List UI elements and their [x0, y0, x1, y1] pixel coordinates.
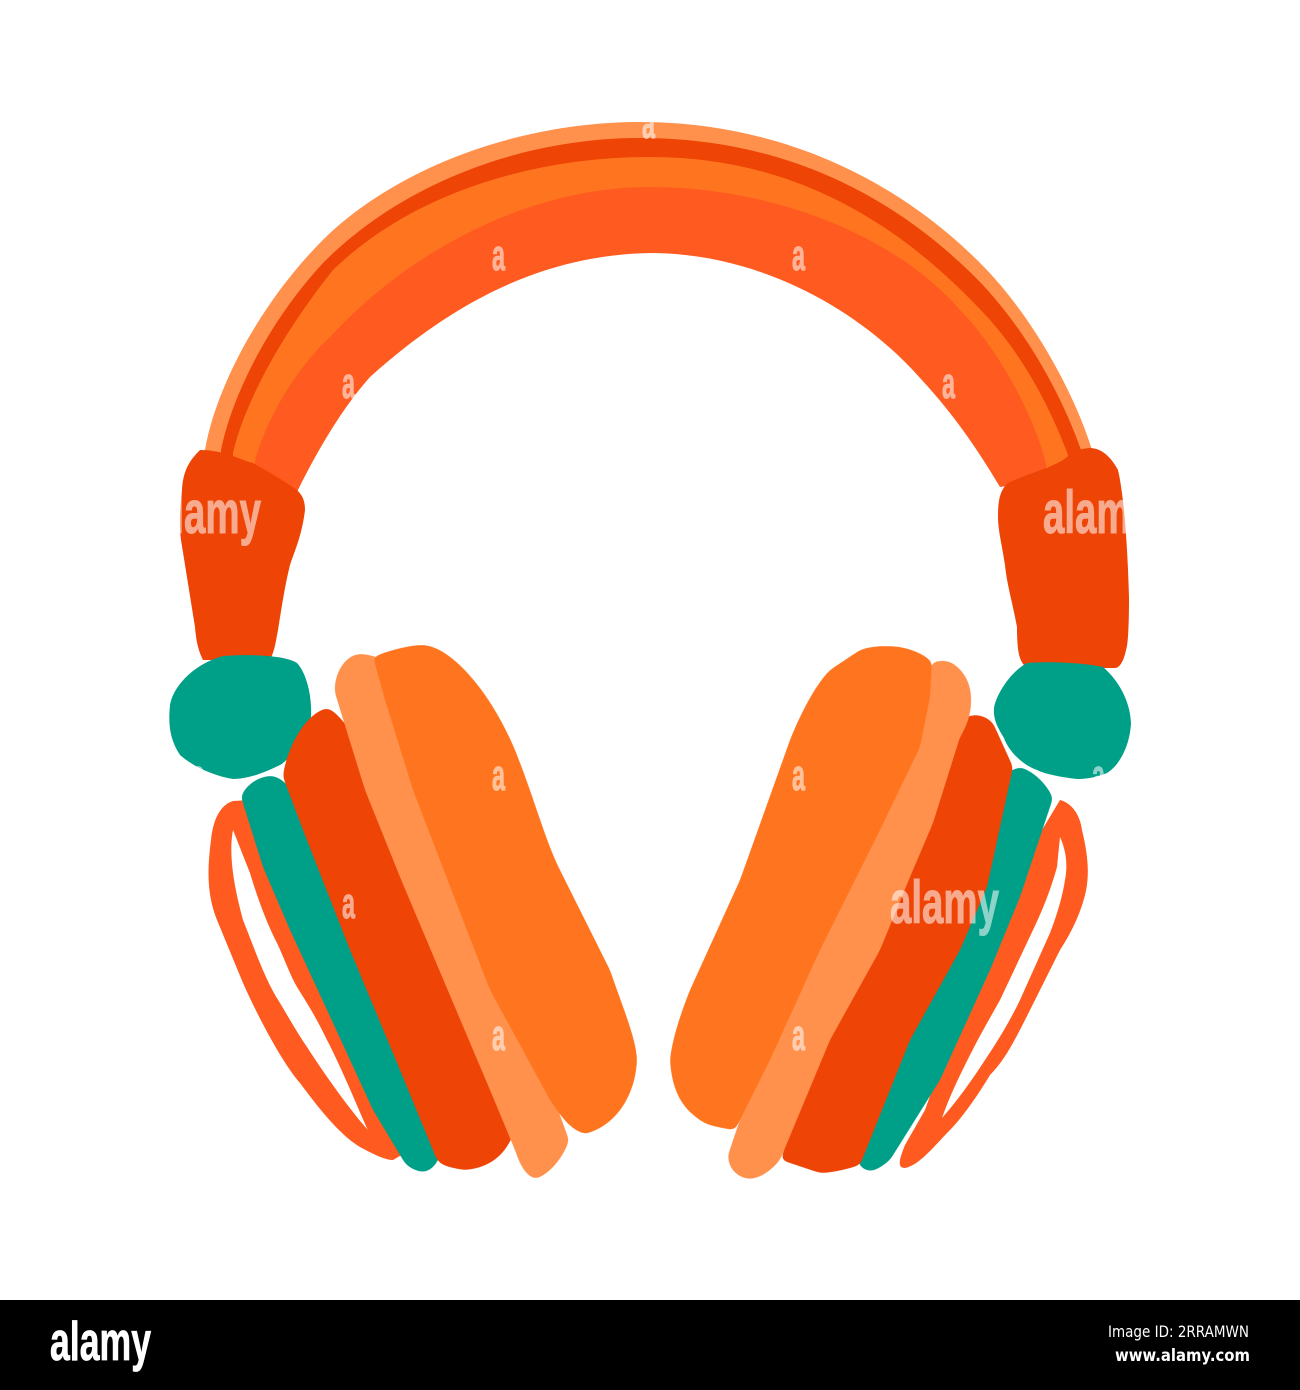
left teal band	[241, 776, 445, 1172]
right ear cup	[670, 646, 1088, 1179]
left teal hinge	[169, 655, 311, 779]
footer image id: Image ID: 2RRAMWN	[1108, 1322, 1249, 1341]
left orange pad	[373, 645, 637, 1134]
left outline opening	[231, 830, 368, 1130]
left ear cup	[209, 645, 637, 1179]
left slider	[180, 450, 305, 660]
watermarks: a	[492, 231, 505, 280]
right slider	[998, 448, 1129, 668]
watermarks: a	[792, 1011, 805, 1060]
watermarks: a	[192, 751, 205, 800]
right orange pad	[670, 646, 932, 1130]
watermarks: a	[792, 751, 805, 800]
right outline opening	[942, 837, 1066, 1118]
footer website: www.alamy.com	[1115, 1346, 1250, 1366]
right teal band	[858, 767, 1053, 1171]
right cushion outline	[900, 800, 1088, 1168]
footer logo: alamy	[50, 1310, 151, 1372]
left cushion outline	[209, 800, 420, 1160]
watermarks: a	[642, 99, 655, 148]
footer bar	[0, 1300, 1300, 1390]
right light pad	[728, 661, 971, 1179]
watermarks	[152, 99, 1152, 1060]
watermarks: a	[342, 879, 355, 928]
headband	[205, 122, 1092, 492]
watermarks: alamy	[1043, 479, 1152, 546]
left dark pad	[283, 708, 513, 1170]
watermarks: a	[792, 231, 805, 280]
watermarks: a	[492, 1011, 505, 1060]
right dark pad	[781, 715, 1013, 1173]
watermarks: alamy	[152, 479, 261, 546]
right teal hinge	[994, 662, 1131, 779]
watermarks: a	[342, 359, 355, 408]
left light pad	[335, 654, 569, 1179]
watermarks: a	[1092, 751, 1105, 800]
watermarks: a	[942, 359, 955, 408]
watermarks: alamy	[890, 869, 999, 936]
watermarks: a	[492, 751, 505, 800]
